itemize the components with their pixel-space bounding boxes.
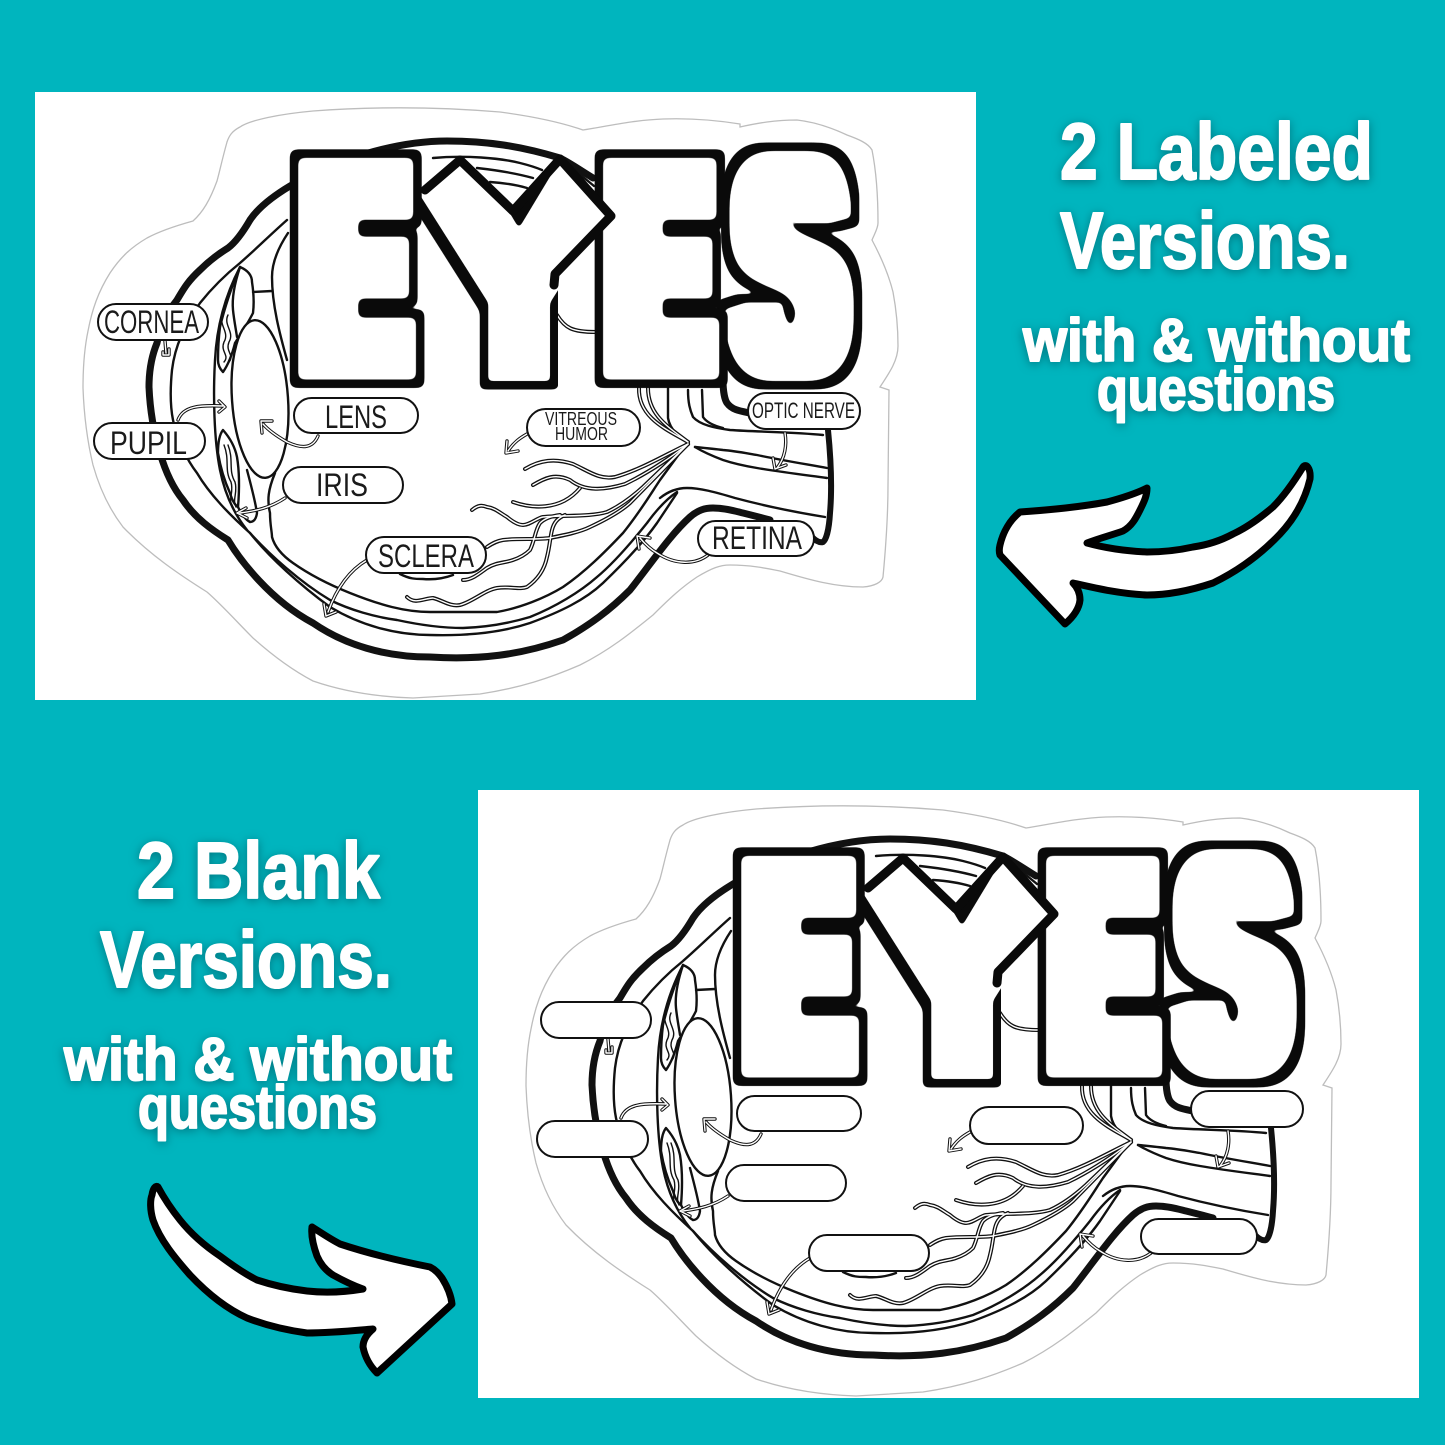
title lettering: EYES: Y: [422, 118, 616, 427]
title lettering: EYES: E: [752, 813, 844, 1121]
label: pupil: PUPIL: [110, 425, 187, 461]
panel: labeled eye diagram: [35, 92, 976, 700]
heading line: Versions.: Versions.: [1060, 196, 1350, 285]
label: optic nerve: OPTIC NERVE: [752, 398, 855, 423]
arrow: pointing to blank panel: [151, 1186, 452, 1373]
sticker cut outline: [526, 806, 1341, 1396]
sticker cut outline: [83, 108, 898, 698]
label: retina: RETINA: [712, 520, 803, 556]
white sheet: [478, 790, 1419, 1398]
label: lens: [294, 398, 418, 435]
label: vitreous humor: HUMOR: [555, 424, 608, 444]
label: optic nerve: [748, 393, 860, 429]
label: vitreous humor: VITREOUS: [545, 409, 617, 429]
title lettering: EYES: [732, 840, 1306, 1088]
label: cornea: CORNEA: [104, 304, 199, 340]
text block: blank versions: [63, 826, 452, 1141]
label: iris: [283, 467, 403, 503]
white sheet: [35, 92, 976, 700]
subheading line: with and without: with & without: [1022, 307, 1410, 374]
text block: labeled versions: [1022, 107, 1410, 423]
arrow: pointing to labeled panel: [999, 466, 1310, 624]
title lettering: EYES: Y: [865, 816, 1059, 1125]
pointer arrows: [163, 341, 786, 616]
label: sclera: SCLERA: [378, 538, 474, 574]
label: iris: IRIS: [316, 467, 368, 503]
title lettering: EYES: [290, 142, 862, 390]
label: vitreous humor: [527, 409, 640, 446]
title lettering: EYES: S: [738, 96, 842, 437]
title lettering: EYES: E: [614, 115, 705, 424]
subheading line: questions: questions: [138, 1074, 377, 1141]
eye anatomy line drawing: [592, 839, 1274, 1356]
title lettering: EYES: S: [1181, 794, 1285, 1135]
subheading line: questions: questions: [1097, 356, 1335, 423]
title lettering: EYES: E: [309, 115, 401, 423]
pointer arrows: [606, 1039, 1229, 1314]
title lettering: EYES: E: [1057, 813, 1148, 1122]
heading line: 2 Labeled: 2 Labeled: [1060, 107, 1373, 196]
panel: blank eye diagram: [478, 790, 1419, 1398]
heading line: 2 Blank: 2 Blank: [137, 826, 380, 915]
subheading line: with and without: with & without: [63, 1026, 452, 1093]
blank label pills: [537, 1002, 1303, 1271]
heading line: Versions.: Versions.: [100, 915, 392, 1004]
eye anatomy line drawing: [149, 141, 831, 658]
label: lens: LENS: [325, 399, 387, 435]
